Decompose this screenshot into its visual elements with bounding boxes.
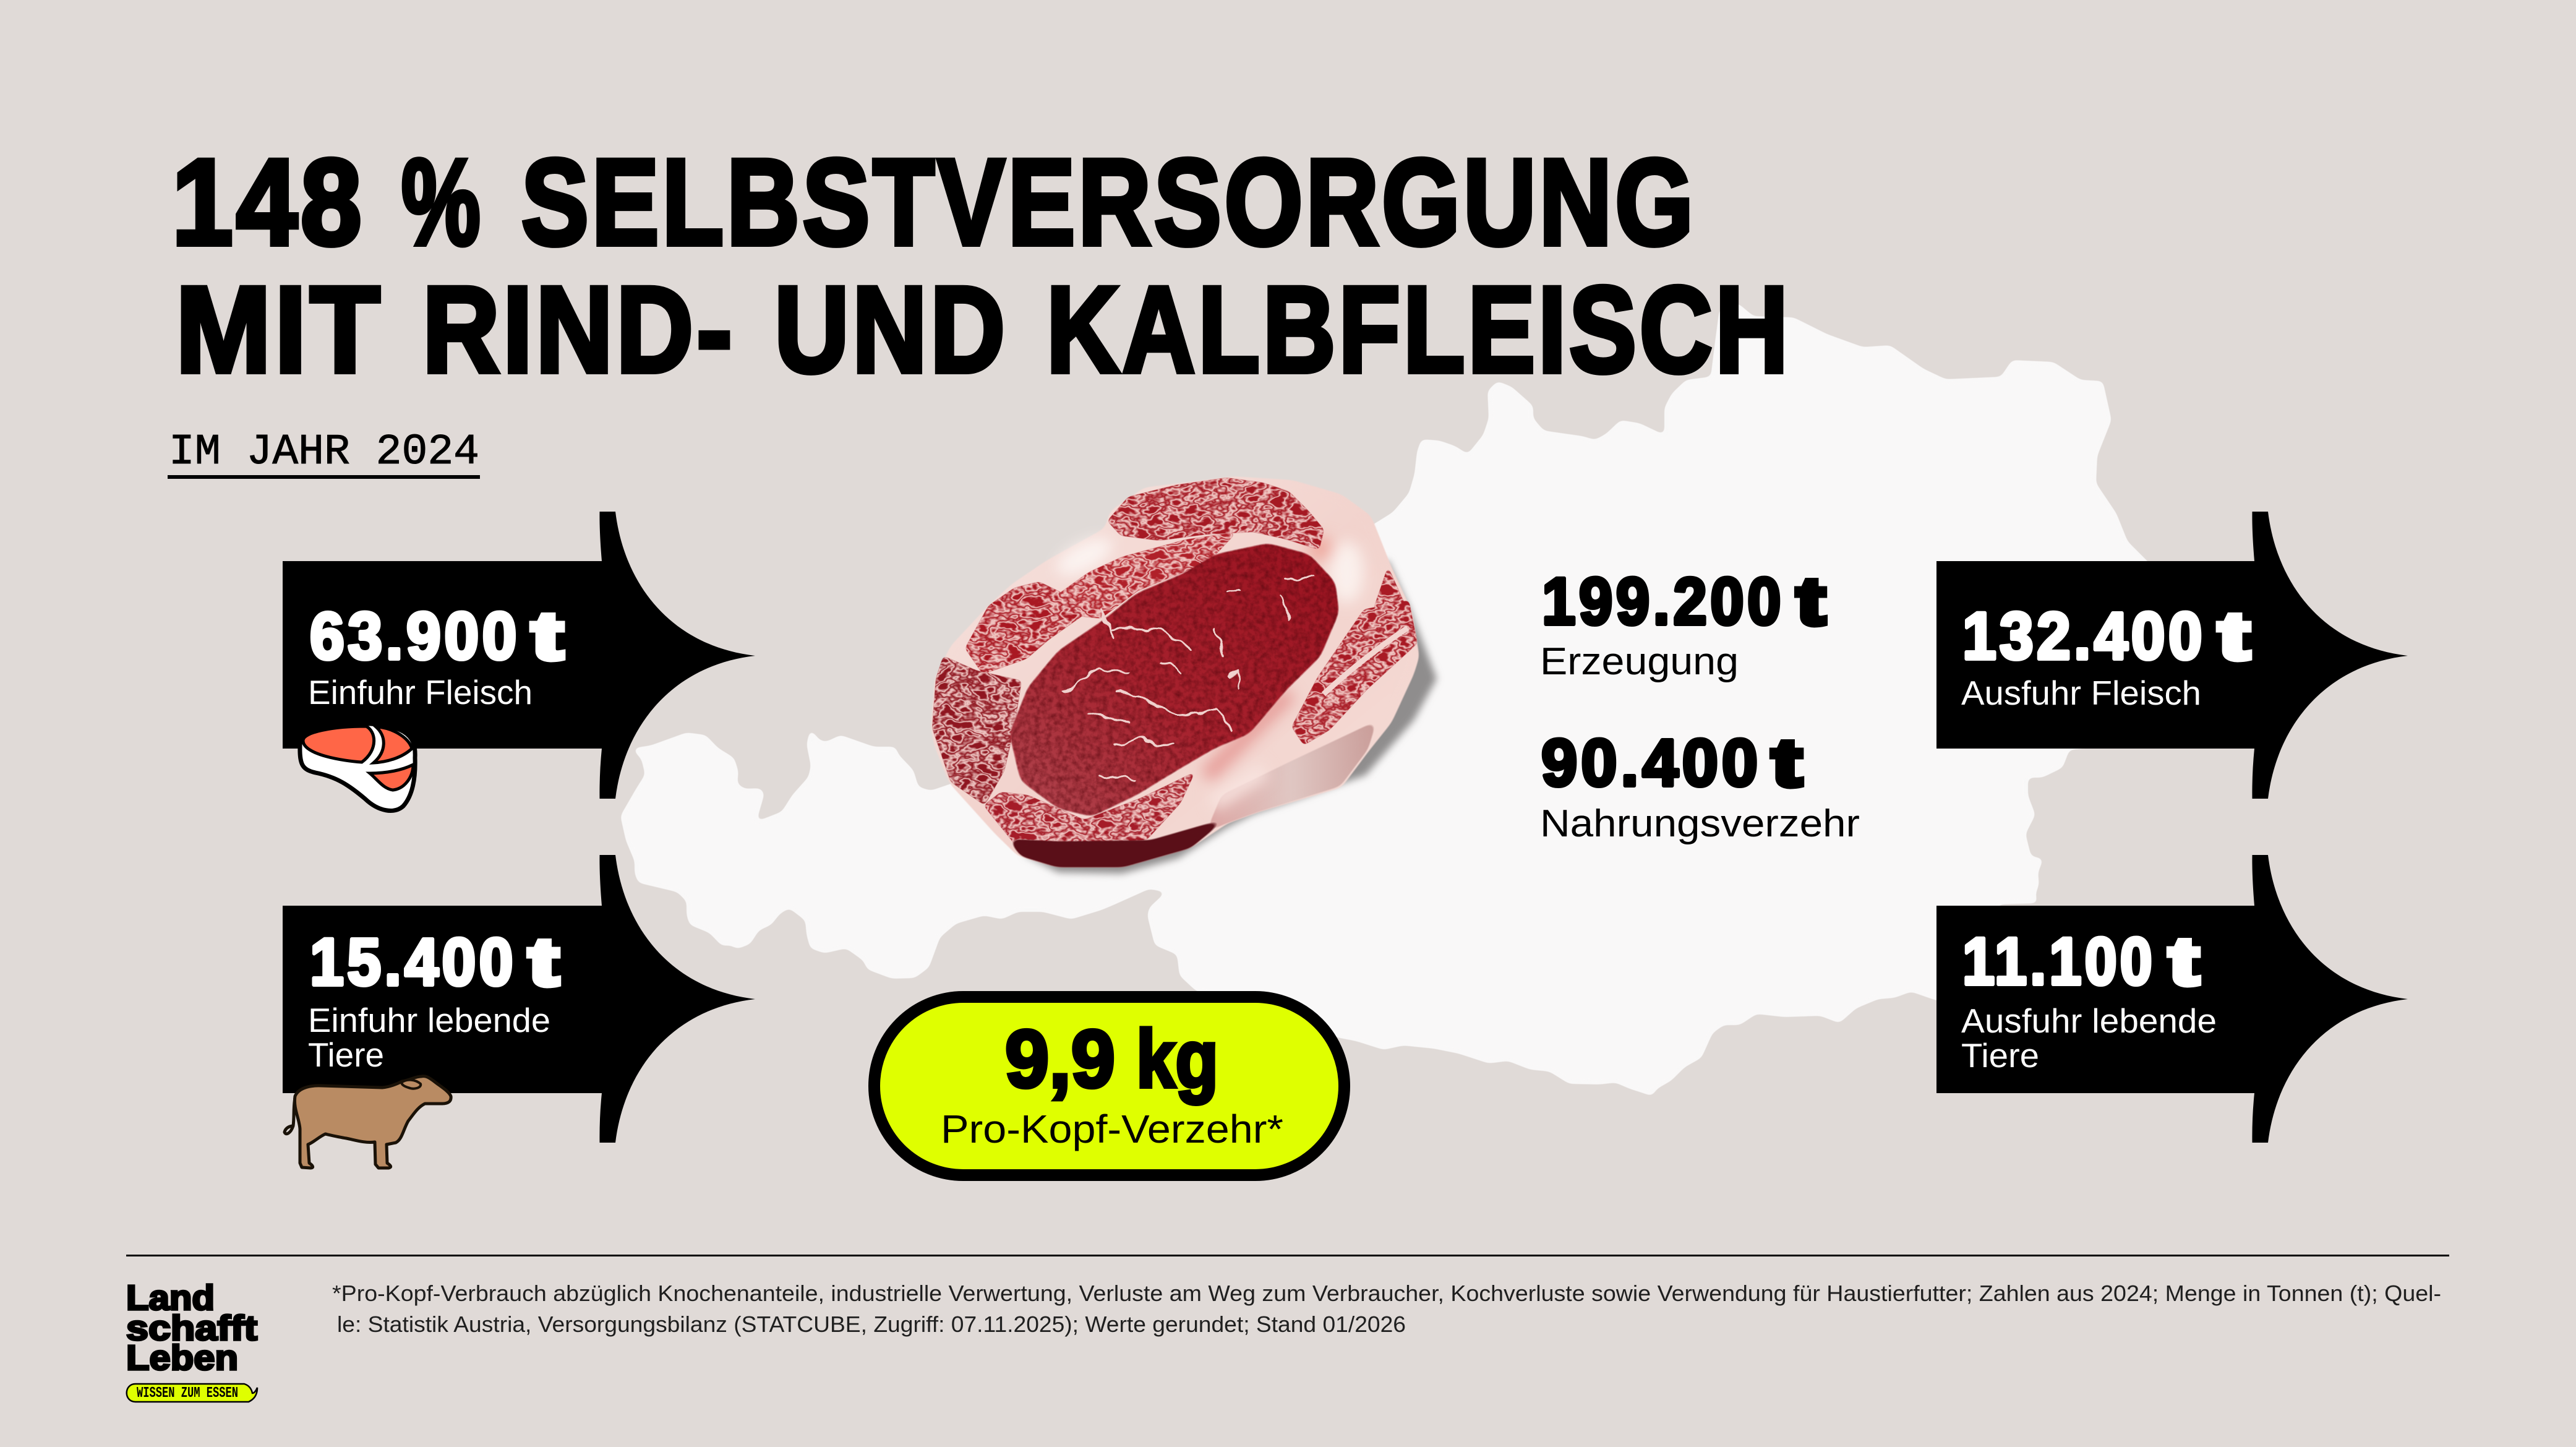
stat: Erzeugung: t (1797, 564, 1825, 638)
stat: Erzeugung: 199.200 (1542, 564, 1784, 638)
arrow: Einfuhr Fleisch: Einfuhr Fleisch (308, 673, 533, 711)
arrow: Ausfuhr Fleisch: 132.400 (1962, 598, 2206, 673)
arrow: Ausfuhr Fleisch: t (2219, 598, 2249, 673)
stat: Nahrungsverzehr: Nahrungsverzehr (1540, 802, 1860, 845)
title: UND (774, 261, 1008, 398)
arrow: Ausfuhr lebende Tiere: Ausfuhr lebende (1961, 1002, 2217, 1040)
arrow: Einfuhr Fleisch: t (532, 598, 563, 673)
callout: Pro-Kopf-Verzehr: Pro-Kopf-Verzehr* (941, 1107, 1283, 1151)
logo: Landschafft Leben (126, 1278, 257, 1402)
title: KALBFLEISCH (1046, 261, 1791, 398)
footnote: le: Statistik Austria, Versorgungsbilanz (STATCUBE, Zugriff: 07.11.2025); Werte gerundet; Stand 01/2026 (337, 1312, 1406, 1337)
marbling veins (1062, 577, 1309, 781)
steak side (1206, 721, 1377, 832)
arrow: Ausfuhr lebende Tiere (1936, 855, 2408, 1143)
title: 148 (172, 134, 365, 270)
stat: Nahrungsverzehr (1540, 725, 1860, 845)
stat: Erzeugung: Erzeugung (1540, 640, 1739, 683)
title: MIT (176, 261, 383, 398)
arrow: Einfuhr lebende Tiere (283, 855, 755, 1143)
icon: steak (300, 724, 415, 810)
callout: Pro-Kopf-Verzehr (875, 997, 1345, 1175)
logo: Landschafft Leben: schafft (126, 1308, 257, 1348)
title: SELBSTVERSORGUNG (521, 134, 1697, 270)
marbled fat strip: far left (932, 656, 1022, 805)
marbled fat strip: top (1107, 478, 1324, 550)
footnote (332, 1281, 2441, 1337)
lean eye of the steak (1009, 543, 1339, 817)
stat: Nahrungsverzehr: 90.400 (1541, 725, 1761, 800)
steak fat base (931, 476, 1419, 867)
logo: Landschafft Leben: Land (126, 1278, 215, 1318)
callout: Pro-Kopf-Verzehr: kg (1136, 1013, 1218, 1104)
title (172, 134, 1791, 398)
arrow: Einfuhr lebende Tiere: Tiere (308, 1036, 384, 1074)
arrow: Ausfuhr lebende Tiere: t (2169, 924, 2199, 998)
fat highlights (1051, 530, 1364, 804)
subtitle: im Jahr 2024: IM JAHR 2024 (169, 428, 479, 477)
logo: Landschafft Leben: Leben (126, 1338, 238, 1378)
arrow: Ausfuhr Fleisch (1936, 512, 2408, 799)
marbled fat strip: left (965, 582, 1087, 674)
arrow: Einfuhr lebende Tiere: t (529, 924, 558, 999)
photo-style illustration: steak (931, 476, 1437, 874)
marbled fat strip: middle (1051, 532, 1237, 619)
callout: Pro-Kopf-Verzehr: 9,9 (1005, 1013, 1115, 1104)
arrow: Einfuhr lebende Tiere: Einfuhr lebende (308, 1001, 550, 1039)
shadow of steak (1024, 560, 1437, 874)
arrow: Einfuhr Fleisch (283, 512, 755, 799)
logo: Landschafft Leben: WISSEN ZUM ESSEN (137, 1385, 238, 1402)
map of Austria (620, 303, 2152, 1096)
icon: cow (285, 1076, 451, 1168)
arrow: Einfuhr Fleisch: 63.900 (310, 598, 520, 673)
arrow: Ausfuhr lebende Tiere: Tiere (1961, 1036, 2039, 1075)
arrow: Ausfuhr lebende Tiere: 11.100 (1962, 924, 2155, 998)
arrow: Ausfuhr Fleisch: Ausfuhr Fleisch (1961, 674, 2201, 712)
marbled fat strip: bottom (983, 771, 1196, 847)
footnote: *Pro-Kopf-Verbrauch abzüglich Knochenanteile, industrielle Verwertung, Verluste am Weg zum Verbraucher, Kochverluste sowie Verwendung für Haustierfutter; Zahlen aus 2024; Menge in Tonnen (t); Quel- (332, 1281, 2441, 1306)
dark bottom edge (1008, 818, 1228, 867)
stat: Nahrungsverzehr: t (1772, 725, 1802, 800)
arrow: Einfuhr lebende Tiere: 15.400 (310, 924, 516, 999)
title: % (401, 134, 483, 270)
marbled fat strip: right (1291, 600, 1418, 745)
stat: Erzeugung (1540, 564, 1825, 683)
title: RIND- (422, 261, 735, 398)
